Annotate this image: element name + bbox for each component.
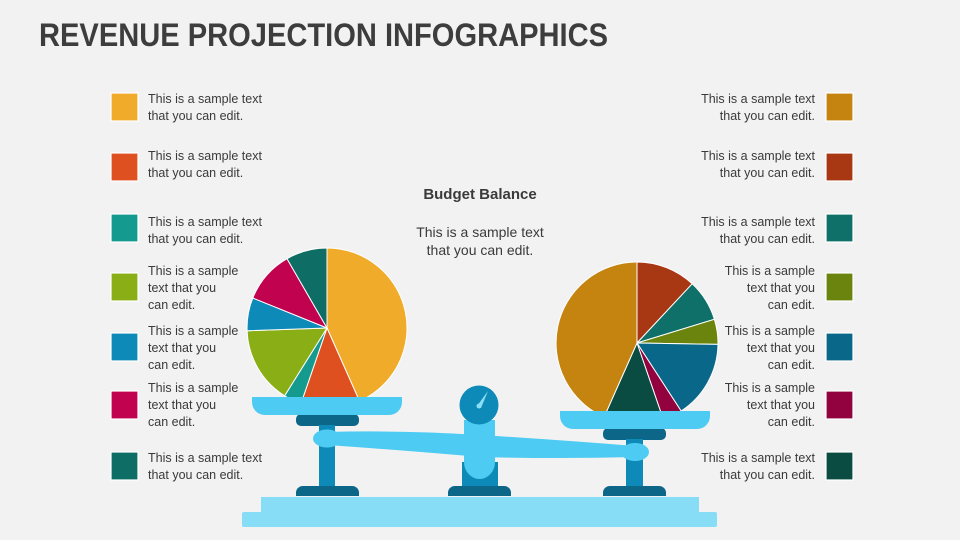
legend item 3: that you can edit. xyxy=(148,232,243,246)
right pie chart xyxy=(556,262,718,424)
balance scale xyxy=(242,386,717,527)
legend item 6: This is a sample xyxy=(148,381,238,395)
left pie chart xyxy=(247,248,407,408)
legend item r4 xyxy=(725,264,853,312)
legend item r4: This is a sample xyxy=(725,264,815,278)
legend item 5: This is a sample xyxy=(148,324,238,338)
legend item r2: that you can edit. xyxy=(720,166,815,180)
legend item 5: can edit. xyxy=(148,358,195,372)
legend item 3 xyxy=(111,214,262,246)
legend item 7: This is a sample text xyxy=(148,451,262,465)
right pan xyxy=(560,411,710,429)
legend item 3: This is a sample text xyxy=(148,215,262,229)
dial xyxy=(460,386,498,424)
legend item r1: This is a sample text xyxy=(701,92,816,106)
legend item r5 xyxy=(725,324,853,372)
beam xyxy=(327,431,635,458)
legend item 7: that you can edit. xyxy=(148,468,243,482)
legend item r4: can edit. xyxy=(768,298,815,312)
legend: right xyxy=(701,92,853,482)
title: REVENUE PROJECTION INFOGRAPHICS xyxy=(39,17,608,53)
legend item 2: that you can edit. xyxy=(148,166,243,180)
legend item r6: This is a sample xyxy=(725,381,815,395)
legend item 1: This is a sample text xyxy=(148,92,262,106)
legend item 6: can edit. xyxy=(148,415,195,429)
left pan xyxy=(252,397,402,415)
legend item r5: can edit. xyxy=(768,358,815,372)
left support xyxy=(296,414,359,426)
center text: that you can edit. xyxy=(427,242,533,258)
legend item r6: can edit. xyxy=(768,415,815,429)
legend item r3: that you can edit. xyxy=(720,232,815,246)
legend item r2 xyxy=(701,149,853,181)
legend item r1: that you can edit. xyxy=(720,109,815,123)
legend item r3: This is a sample text xyxy=(701,215,816,229)
legend item r5: This is a sample xyxy=(725,324,815,338)
legend item r7 xyxy=(701,451,853,482)
legend: left xyxy=(111,92,262,482)
legend item r3 xyxy=(701,214,853,246)
legend item r7: that you can edit. xyxy=(720,468,815,482)
legend item 4 xyxy=(111,264,238,312)
legend item 6 xyxy=(111,381,238,429)
legend item 5 xyxy=(111,324,238,372)
legend item r4: text that you xyxy=(747,281,815,295)
legend item 2 xyxy=(111,149,262,181)
center support xyxy=(462,462,498,488)
base xyxy=(261,497,699,513)
right support xyxy=(603,428,666,440)
legend item 1 xyxy=(111,92,262,123)
legend item r6: text that you xyxy=(747,398,815,412)
legend item 4: text that you xyxy=(148,281,216,295)
legend item 4: This is a sample xyxy=(148,264,238,278)
legend item r6 xyxy=(725,381,853,429)
legend item 4: can edit. xyxy=(148,298,195,312)
legend item 5: text that you xyxy=(148,341,216,355)
legend item 6: text that you xyxy=(148,398,216,412)
legend item r2: This is a sample text xyxy=(701,149,816,163)
center heading: Budget Balance xyxy=(423,186,537,203)
center text xyxy=(416,224,544,258)
legend item r5: text that you xyxy=(747,341,815,355)
legend item 2: This is a sample text xyxy=(148,149,262,163)
legend item r7: This is a sample text xyxy=(701,451,816,465)
legend item 7 xyxy=(111,451,262,482)
legend item 1: that you can edit. xyxy=(148,109,243,123)
legend item r1 xyxy=(701,92,853,123)
center text: This is a sample text xyxy=(416,224,544,240)
